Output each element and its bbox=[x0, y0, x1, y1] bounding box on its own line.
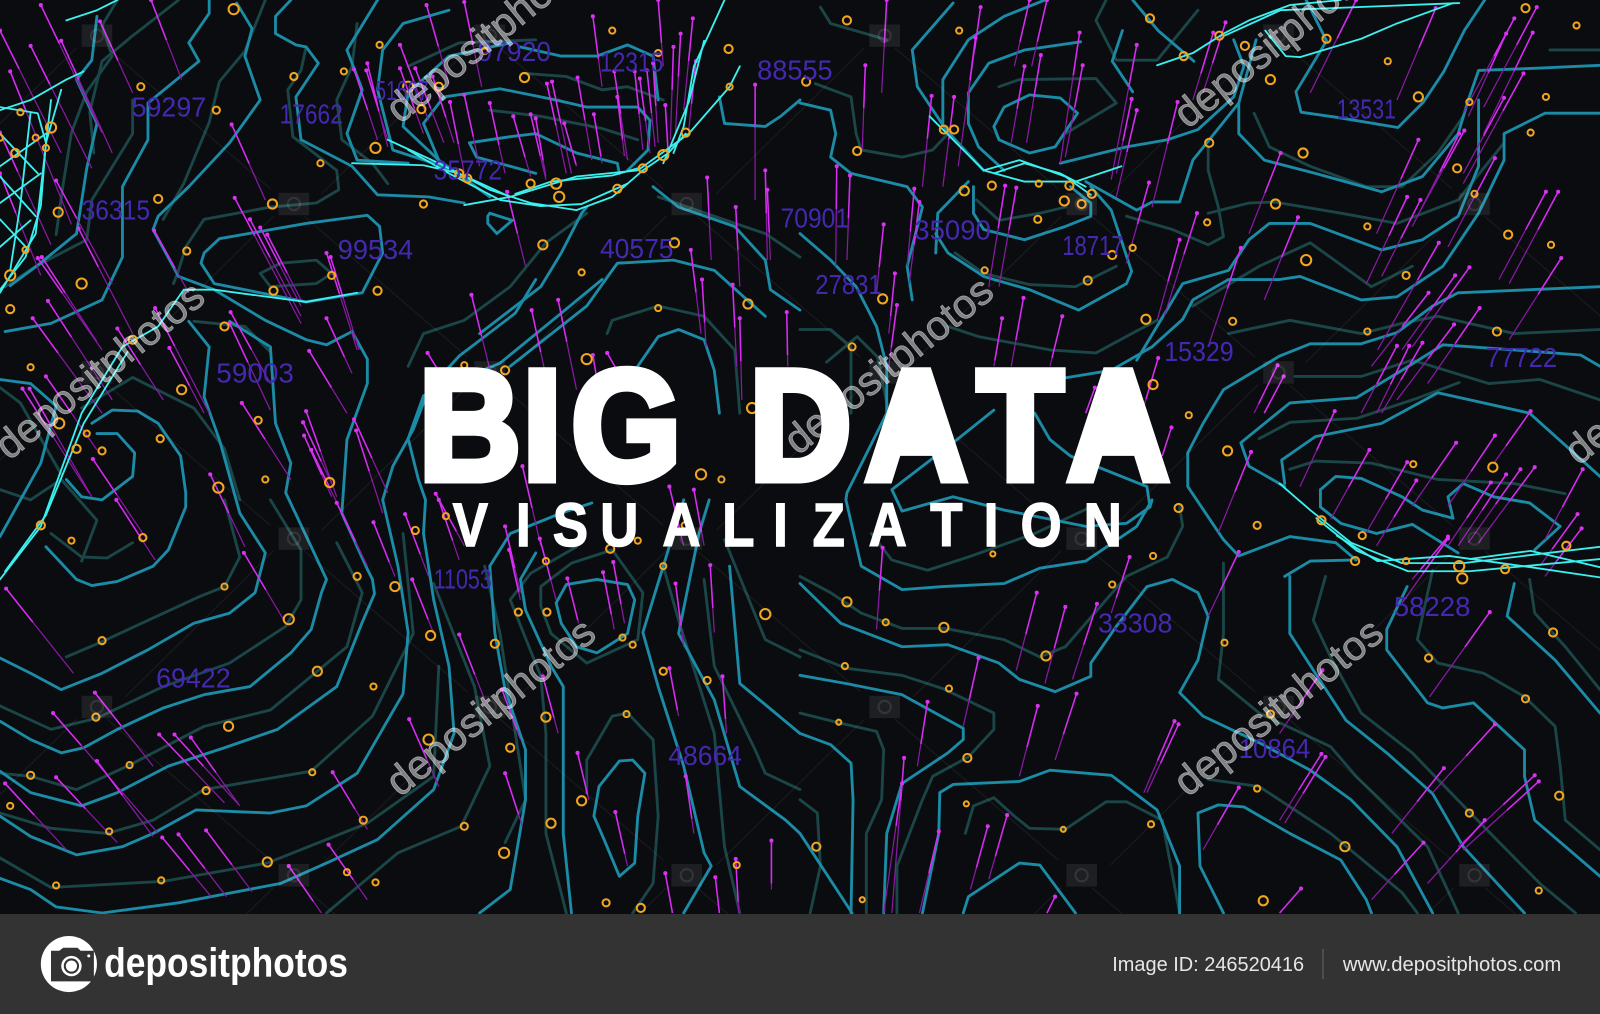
purple data numbers: 40575 bbox=[600, 233, 673, 264]
solid letter A fills bbox=[900, 393, 1139, 454]
purple data numbers: 17662 bbox=[280, 98, 343, 129]
purple data numbers: 35090 bbox=[914, 215, 991, 246]
purple data numbers: 59297 bbox=[132, 91, 206, 122]
footer logo: depositphotos bbox=[41, 936, 348, 992]
purple data numbers: 59003 bbox=[216, 358, 294, 389]
purple data numbers: 36315 bbox=[82, 194, 150, 225]
purple data numbers: 35772 bbox=[434, 155, 502, 186]
purple data numbers: 99534 bbox=[338, 234, 413, 265]
purple data numbers: 11053 bbox=[434, 564, 492, 595]
logo wordmark: depositphotos bbox=[104, 939, 348, 985]
bright cyan contour bundles bbox=[0, 0, 1600, 579]
title text: BIG DATA bbox=[419, 338, 1169, 513]
purple data numbers: 15329 bbox=[1164, 336, 1234, 367]
purple data numbers: 18717 bbox=[1062, 230, 1123, 261]
purple data numbers: 69422 bbox=[156, 663, 231, 694]
depositphotos watermarks: depositphotos bbox=[377, 608, 604, 805]
purple data numbers: 48664 bbox=[668, 740, 742, 771]
purple data numbers bbox=[82, 36, 1557, 771]
icon: camera badge bbox=[41, 936, 97, 992]
depositphotos watermarks: depositphotos bbox=[1164, 608, 1392, 805]
depositphotos watermarks: depositphotos bbox=[775, 267, 1002, 463]
subtitle: VISUALIZATION: VISUALIZATION bbox=[453, 491, 1122, 560]
purple data numbers: 10864 bbox=[1239, 733, 1310, 764]
purple data numbers: 70901 bbox=[781, 202, 849, 233]
title: BIG DATA bbox=[419, 338, 1169, 513]
purple data numbers: 12315 bbox=[600, 46, 663, 77]
purple data numbers: 27831 bbox=[815, 269, 882, 300]
purple data numbers: 77722 bbox=[1486, 342, 1557, 373]
image id text: Image ID: 246520416 bbox=[1112, 954, 1304, 976]
purple data numbers: 33308 bbox=[1098, 607, 1172, 638]
purple data numbers: 58228 bbox=[1394, 591, 1470, 622]
purple data numbers: 13531 bbox=[1337, 93, 1396, 124]
website text: www.depositphotos.com bbox=[1342, 954, 1561, 976]
purple data numbers: 97920 bbox=[478, 36, 551, 67]
footer bar bbox=[0, 914, 1600, 1014]
purple data numbers: 51667 bbox=[376, 75, 429, 106]
depositphotos watermarks bbox=[0, 0, 1600, 805]
purple data numbers: 88555 bbox=[757, 55, 833, 86]
